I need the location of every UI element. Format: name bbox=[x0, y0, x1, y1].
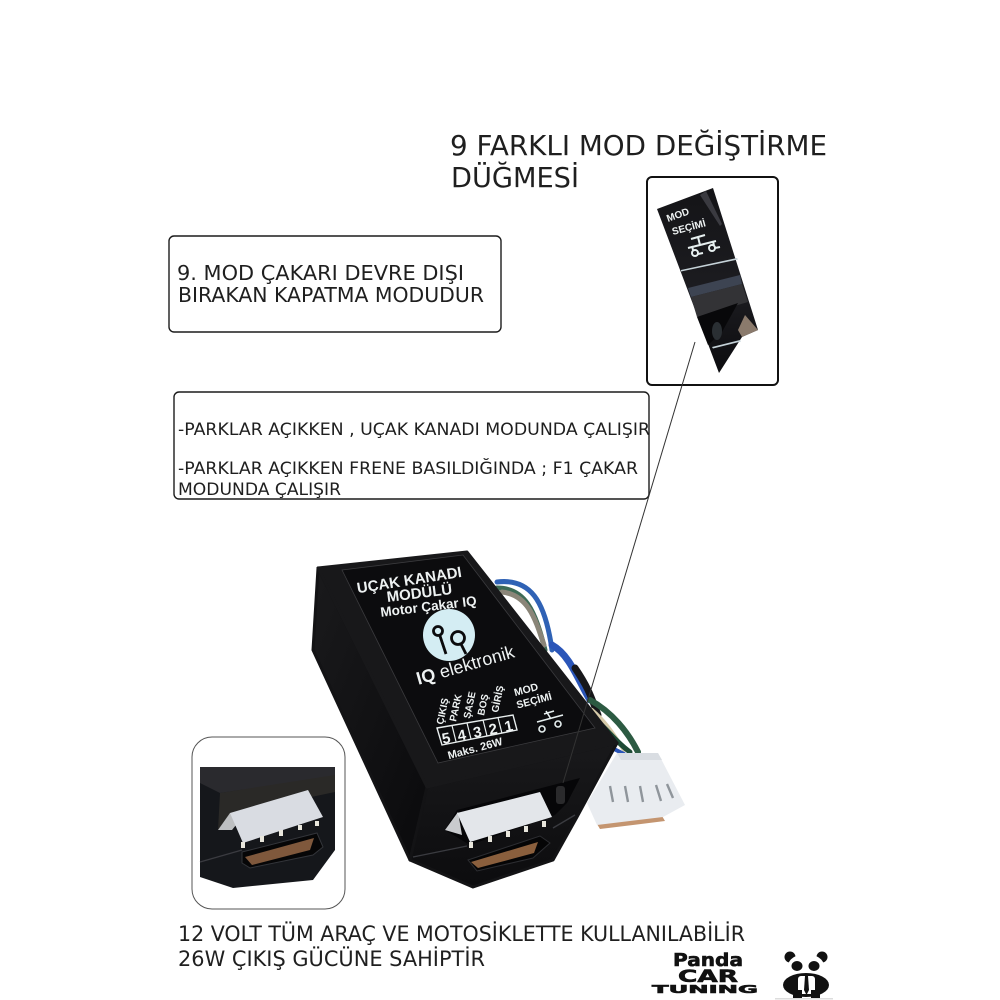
icon: switch symbol bbox=[688, 235, 720, 256]
mode label: SEÇİMİ bbox=[515, 690, 553, 712]
label plate bbox=[342, 555, 595, 763]
port labels: GİRİŞ bbox=[488, 684, 507, 714]
callout: parking light modes: MODUNDA ÇALIŞIR bbox=[178, 480, 341, 500]
power rating: Maks. 26W bbox=[447, 736, 505, 762]
mounting slot bbox=[468, 836, 550, 871]
switch knob bbox=[556, 786, 565, 804]
port labels: BOŞ bbox=[476, 693, 492, 717]
socket connector bbox=[445, 792, 552, 848]
callout: mode 9 bbox=[169, 236, 501, 332]
specification text: 12 VOLT TÜM ARAÇ VE MOTOSİKLETTE KULLANILABİLİR bbox=[178, 921, 745, 946]
brand wordmark bbox=[652, 950, 758, 996]
callout: parking light modes bbox=[174, 392, 650, 500]
label heading bbox=[356, 564, 477, 620]
title bbox=[450, 128, 827, 194]
close-up photo bbox=[200, 767, 335, 888]
callout: parking light modes: -PARKLAR AÇIKKEN , UÇAK KANADI MODUNDA ÇALIŞIR bbox=[178, 420, 650, 440]
label heading: MODÜLÜ bbox=[386, 581, 453, 606]
leader line bbox=[563, 342, 695, 783]
port number box: 54321 bbox=[441, 718, 514, 748]
icon: switch symbol bbox=[537, 711, 563, 732]
body left side bbox=[313, 568, 427, 860]
module photo bbox=[313, 552, 685, 887]
mode label bbox=[513, 681, 553, 712]
specification text: 26W ÇIKIŞ GÜCÜNE SAHİPTİR bbox=[178, 946, 485, 971]
body top bbox=[318, 552, 617, 787]
panel: mode button detail bbox=[647, 177, 778, 385]
brand wordmark: Panda bbox=[673, 950, 743, 971]
brand wordmark: CAR bbox=[678, 967, 738, 987]
title: DÜĞMESİ bbox=[451, 160, 579, 194]
wires bbox=[497, 582, 638, 754]
callout: mode 9: 9. MOD ÇAKARI DEVRE DIŞI bbox=[177, 261, 464, 285]
panel: connector close-up bbox=[192, 737, 345, 909]
body front bbox=[410, 743, 617, 887]
button label bbox=[665, 206, 707, 238]
icon: IQ logo bbox=[423, 609, 475, 661]
title: 9 FARKLI MOD DEĞİŞTİRME bbox=[450, 128, 827, 162]
specification text bbox=[178, 921, 745, 971]
callout: mode 9: BIRAKAN KAPATMA MODUDUR bbox=[178, 283, 484, 307]
label heading: Motor Çakar IQ bbox=[380, 593, 477, 620]
icon: panda mascot bbox=[775, 952, 833, 1000]
callout: parking light modes: -PARKLAR AÇIKKEN FRENE BASILDIĞINDA ; F1 ÇAKAR bbox=[178, 457, 638, 479]
brand wordmark: TUNING bbox=[652, 983, 758, 996]
label heading: UÇAK KANADI bbox=[356, 564, 463, 597]
port labels bbox=[435, 684, 507, 726]
front opening bbox=[445, 778, 580, 845]
brand text: IQ elektronik bbox=[414, 641, 518, 689]
mode label: MOD bbox=[513, 681, 540, 699]
button label: MOD bbox=[665, 206, 691, 225]
port labels: PARK bbox=[448, 693, 465, 723]
port labels: ÇIKIŞ bbox=[435, 697, 452, 726]
port labels: ŞASE bbox=[462, 690, 479, 720]
photo strip of button bbox=[657, 188, 758, 373]
button label: SEÇİMİ bbox=[670, 216, 707, 238]
white connector bbox=[587, 753, 685, 829]
flange highlight bbox=[413, 815, 575, 857]
